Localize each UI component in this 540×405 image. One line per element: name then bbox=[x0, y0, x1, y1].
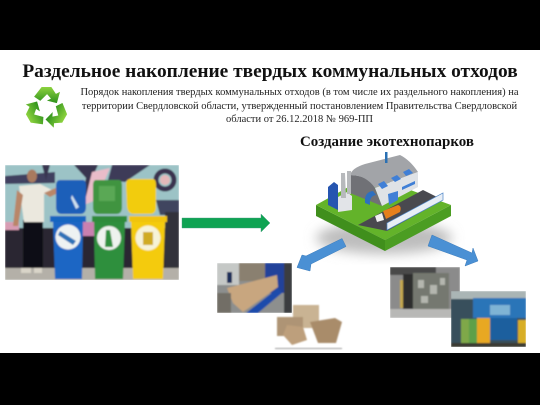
text block: description: территории Свердловской области, утвержденный постановлением Правительства Свердловской bbox=[82, 101, 517, 112]
photo: baled cardboard bbox=[217, 263, 292, 313]
road bbox=[358, 190, 443, 231]
illustration: cardboard boxes bbox=[275, 305, 342, 349]
bottom black bar bbox=[0, 353, 540, 405]
text block: description bbox=[80, 87, 519, 125]
text block: description: Порядок накопления твердых коммунальных отходов (в том числе их раздельного накопления) на bbox=[80, 87, 519, 98]
platform bbox=[316, 205, 385, 251]
photo: plastic barrels bbox=[451, 291, 526, 347]
green bin bbox=[93, 180, 122, 214]
building bbox=[350, 175, 382, 206]
top black bar bbox=[0, 0, 540, 50]
man bbox=[23, 220, 43, 268]
yellow bin bbox=[126, 179, 156, 214]
plant bbox=[338, 192, 352, 212]
photo: baled plastic bbox=[390, 267, 460, 318]
photo: man with sorting bins bbox=[5, 165, 179, 280]
truck bbox=[383, 205, 401, 219]
title: Раздельное накопление твердых коммунальных отходов bbox=[22, 61, 518, 82]
icon: recycling symbol bbox=[21, 87, 71, 131]
arrow: blue left bbox=[297, 238, 346, 271]
illustration: eco-technopark factory bbox=[316, 152, 452, 254]
text block: description: области от 26.12.2018 № 969-ПП bbox=[226, 114, 373, 125]
arrow: green bbox=[182, 214, 270, 232]
blue bin bbox=[56, 180, 86, 214]
arrow: blue right bbox=[428, 235, 478, 266]
heading: eco-technoparks: Создание экотехнопарков bbox=[300, 134, 474, 150]
